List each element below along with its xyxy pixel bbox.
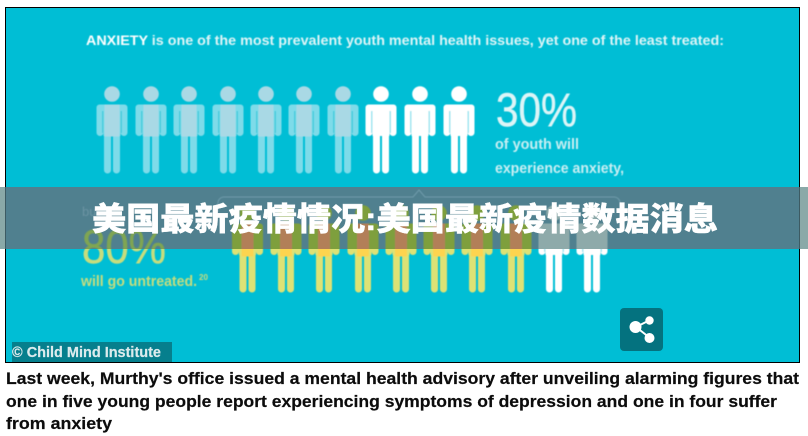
stat: 30 percent xyxy=(495,83,624,177)
content seen through the band: 80% xyxy=(82,220,166,273)
icon: share button xyxy=(620,308,663,351)
stat: 80 percent: 80% xyxy=(82,220,166,273)
heading: anxiety statement: ANXIETY is one of the most prevalent youth mental health issues, yet one of the least treated: xyxy=(86,32,724,48)
stat: 80 percent: will go untreated. xyxy=(80,273,197,290)
caption xyxy=(6,369,799,433)
title: 美国最新疫情情况:美国最新疫情数据消息 xyxy=(92,201,718,237)
content seen through the band xyxy=(82,190,620,249)
caption: one in five young people report experiencing symptoms of depression and one in four suffer xyxy=(6,392,777,411)
stat: 30 percent: 30% xyxy=(496,83,577,136)
stat: 80 percent: 20 xyxy=(199,273,208,282)
pictogram row: 80 percent untreated xyxy=(232,205,608,292)
caption: from anxiety xyxy=(6,414,113,433)
credit badge: © Child Mind Institute xyxy=(12,345,161,361)
stat: 80 percent xyxy=(80,220,208,290)
callout tip xyxy=(413,188,425,196)
content seen through the band: but xyxy=(82,204,100,219)
stat: 30 percent: experience anxiety, xyxy=(495,160,624,177)
stat: 30 percent: of youth will xyxy=(495,136,579,153)
caption: Last week, Murthy's office issued a mental health advisory after unveiling alarming figures that xyxy=(6,369,799,388)
title band xyxy=(0,187,808,249)
pictogram row: 30 percent of youth xyxy=(96,86,474,174)
